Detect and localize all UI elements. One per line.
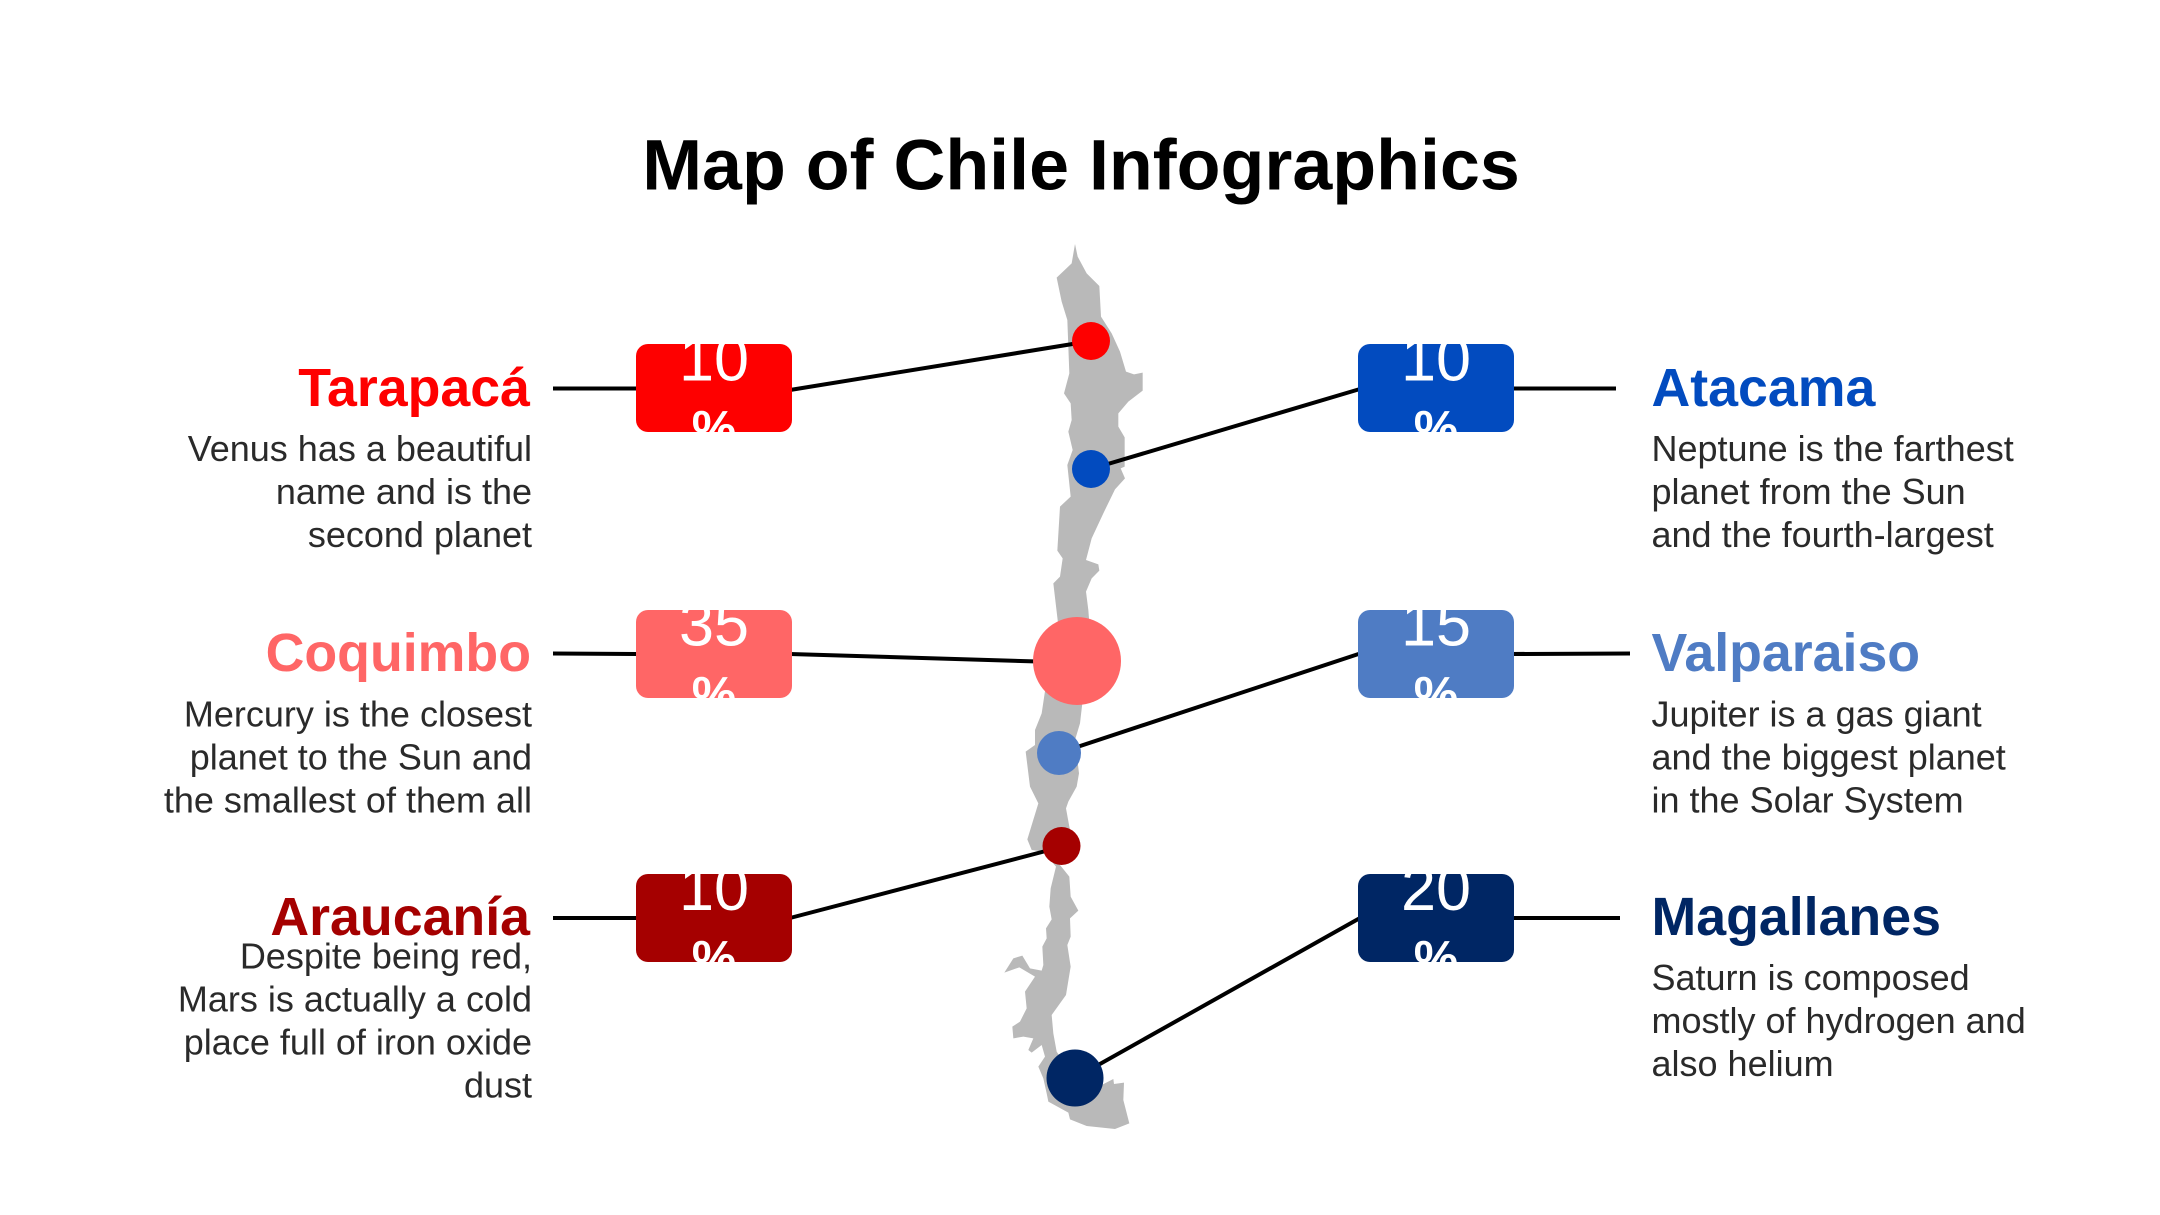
percent badge: Tarapacá (636, 344, 792, 432)
text: Valparaiso: Jupiter is a gas giant (1652, 694, 1982, 734)
percent badge: Tarapacá: 10 (679, 324, 749, 394)
map marker: Valparaiso (1037, 731, 1081, 775)
text: Tarapacá: Venus has a beautiful (188, 428, 532, 469)
text: Magallanes: also helium (1652, 1043, 1834, 1084)
map marker: Coquimbo (1033, 617, 1121, 705)
percent badge: Tarapacá: % (692, 400, 736, 456)
panel: Araucanía (178, 827, 1080, 1106)
text: Atacama: Neptune is the farthest (1652, 428, 2014, 469)
text: Araucanía: place full of iron oxide (184, 1022, 532, 1062)
heading: Valparaiso: Valparaiso (1652, 623, 1920, 683)
text: Atacama: and the fourth-largest (1652, 514, 1994, 555)
text: Valparaiso: and the biggest planet (1652, 736, 2006, 778)
heading: Coquimbo: Coquimbo (266, 623, 531, 683)
text: Tarapacá: second planet (308, 514, 532, 555)
percent badge: Atacama: % (1414, 400, 1458, 456)
panel: Coquimbo (164, 610, 1121, 813)
percent badge: Coquimbo (636, 610, 792, 698)
percent badge: Coquimbo: 35 (679, 590, 749, 660)
percent badge: Coquimbo: % (692, 666, 736, 722)
map marker: Tarapacá (1072, 322, 1110, 360)
percent badge: Araucanía (636, 874, 792, 962)
heading: Tarapacá: Tarapacá (298, 358, 530, 418)
map marker: Atacama (1072, 450, 1110, 488)
title: Map of Chile Infographics (642, 126, 1520, 206)
heading: Atacama: Atacama (1652, 358, 1876, 418)
text: Coquimbo: the smallest of them all (164, 780, 532, 820)
panel: Valparaiso (1037, 590, 2006, 820)
text: Coquimbo: Mercury is the closest (184, 694, 532, 734)
percent badge: Araucanía: % (692, 930, 736, 986)
percent badge: Araucanía: 10 (679, 854, 749, 924)
heading: Magallanes: Magallanes (1652, 887, 1941, 947)
text: Tarapacá: name and is the (276, 471, 532, 512)
text: Coquimbo: planet to the Sun and (190, 736, 532, 778)
percent badge: Valparaiso: % (1414, 666, 1458, 722)
percent badge: Magallanes (1358, 874, 1514, 962)
text: Araucanía: dust (464, 1064, 532, 1106)
percent badge: Valparaiso: 15 (1401, 590, 1471, 660)
percent badge: Magallanes: 20 (1401, 854, 1471, 924)
text: Atacama: planet from the Sun (1652, 471, 1966, 512)
map of Chile (1004, 244, 1143, 1129)
text: Araucanía: Despite being red, (240, 936, 532, 976)
panel: Tarapacá (188, 322, 1110, 555)
panel: Atacama (1072, 324, 2014, 555)
text: Araucanía: Mars is actually a cold (178, 978, 532, 1020)
text: Magallanes: mostly of hydrogen and (1652, 1000, 2026, 1041)
percent badge: Valparaiso (1358, 610, 1514, 698)
map marker: Araucanía (1042, 827, 1080, 865)
percent badge: Atacama: 10 (1401, 324, 1471, 394)
panel: Magallanes (1046, 854, 2026, 1106)
percent badge: Magallanes: % (1414, 930, 1458, 986)
text: Valparaiso: in the Solar System (1652, 780, 1964, 820)
heading: Araucanía: Araucanía (270, 887, 531, 947)
map marker: Magallanes (1046, 1050, 1104, 1106)
text: Magallanes: Saturn is composed (1652, 957, 1970, 998)
percent badge: Atacama (1358, 344, 1514, 432)
